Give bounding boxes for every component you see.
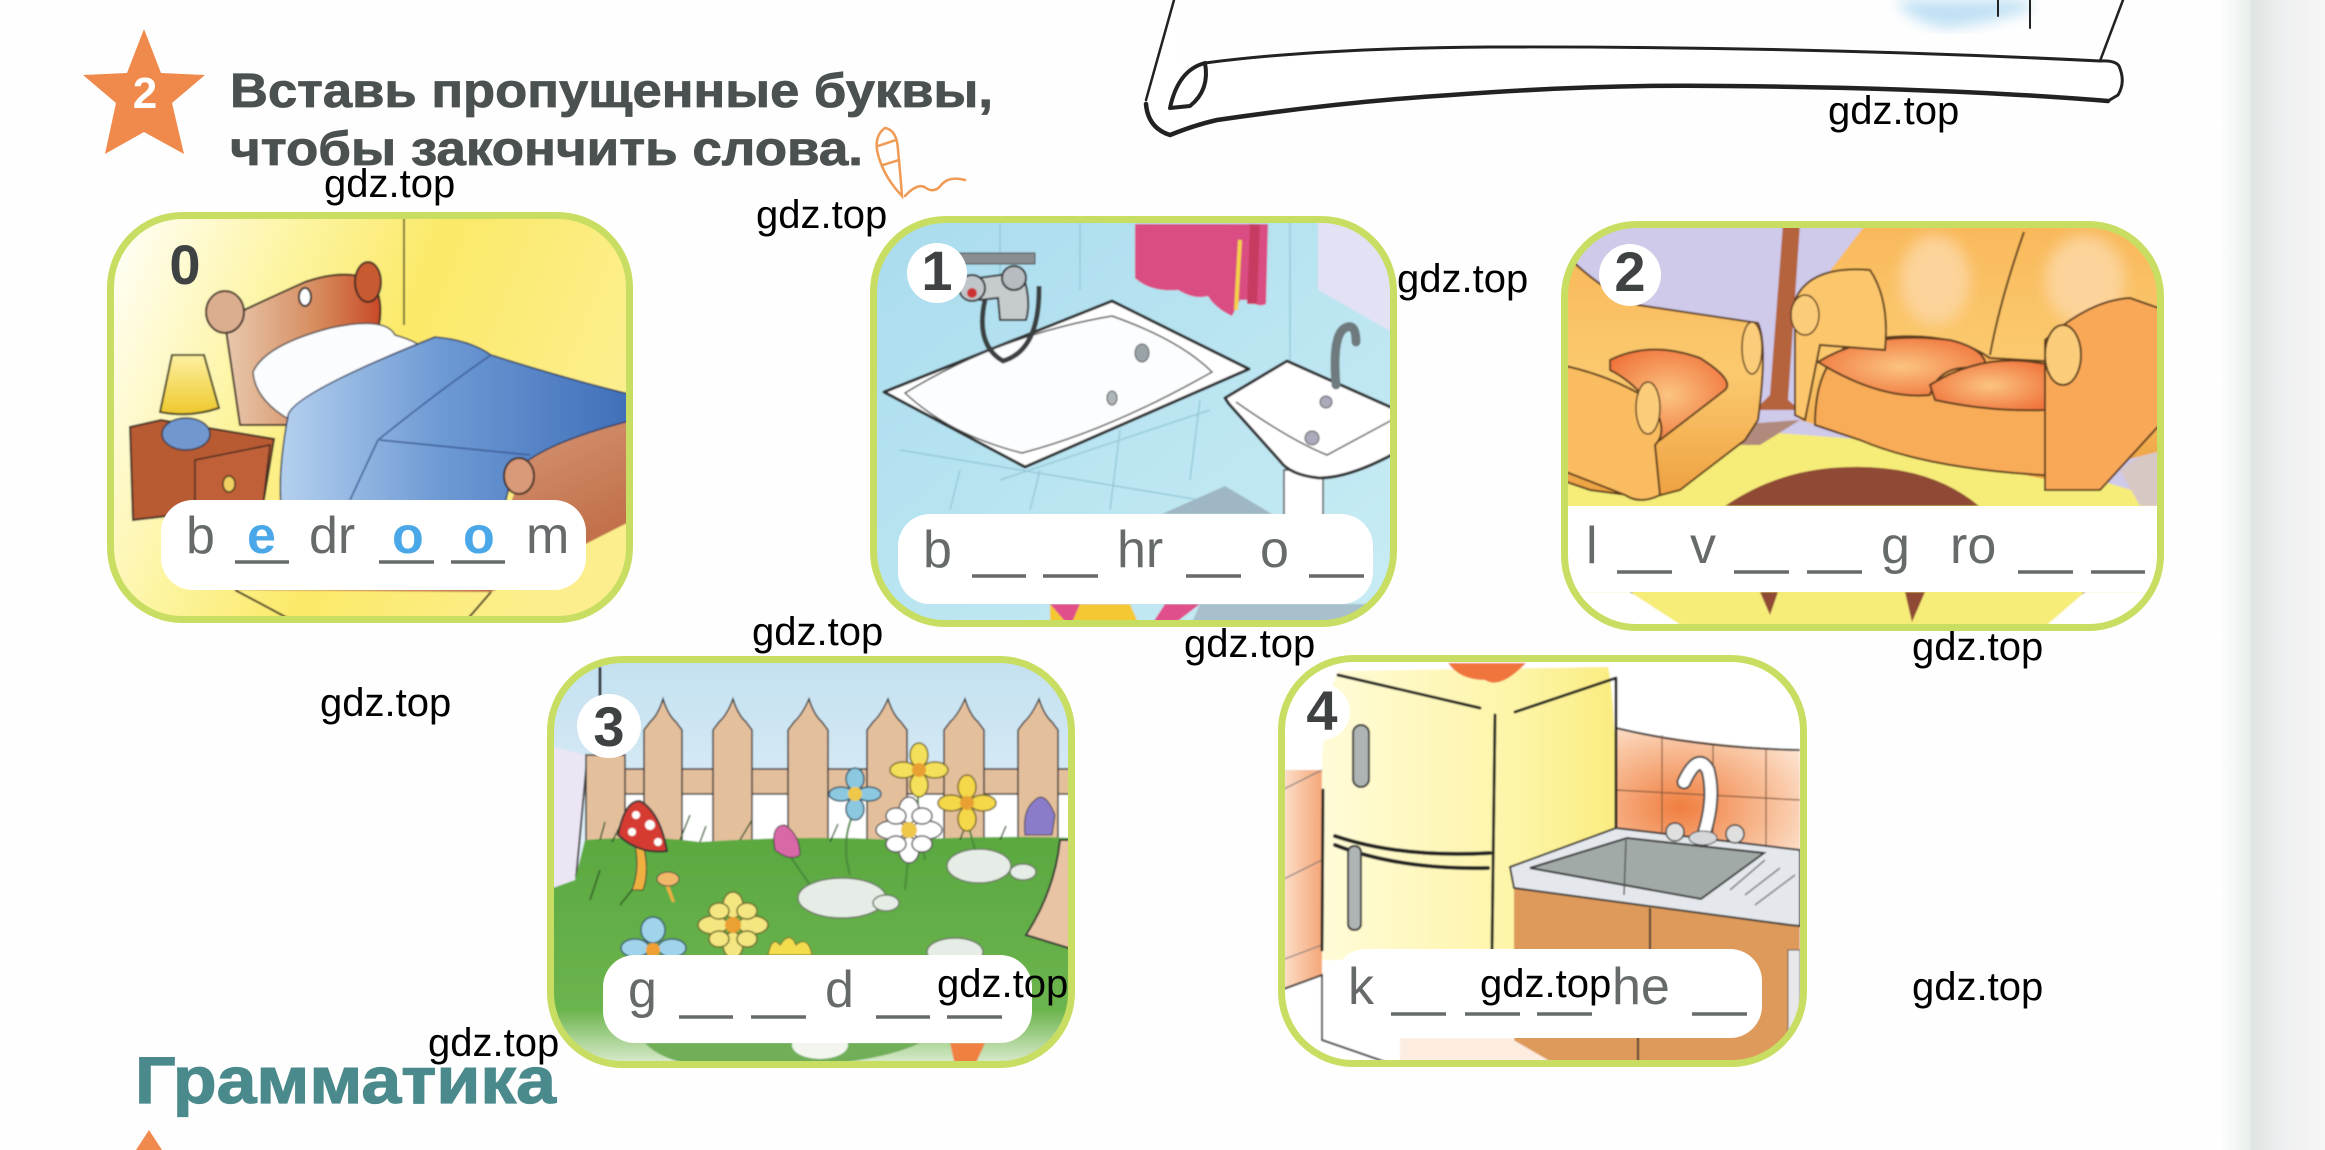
- panel 4: kitchen: [1278, 655, 1807, 1067]
- floor lamp pole: [1755, 224, 1800, 410]
- stones: [798, 849, 1036, 966]
- panel 3 frame: [550, 660, 1072, 1064]
- bed knob: [504, 458, 534, 494]
- nightstand: [130, 420, 274, 520]
- side wall: [554, 746, 586, 887]
- number 4: 4: [1306, 679, 1338, 742]
- instruction heading: Вставь пропущенные буквы,: [230, 65, 993, 118]
- word card: kitchen: [1334, 949, 1762, 1038]
- panel 2 frame: [1564, 224, 2160, 628]
- sink: [1510, 828, 1800, 926]
- cabinet: [1514, 885, 1800, 1067]
- basin tap: [1335, 327, 1356, 385]
- floor rim: [234, 590, 492, 616]
- word card: bedroom: b: [186, 507, 215, 565]
- word card: kitchen: he: [1612, 958, 1670, 1016]
- word card: bedroom: o: [463, 507, 495, 565]
- panel 1 frame: [874, 220, 1394, 624]
- watermarks: gdz.top: [320, 681, 451, 725]
- faucet: [1666, 763, 1744, 845]
- floor rug: [1561, 430, 2164, 631]
- instruction heading: [230, 65, 993, 176]
- watermarks: gdz.top: [324, 162, 455, 206]
- word card: bedroom: [161, 500, 586, 590]
- watermarks: gdz.top: [937, 962, 1068, 1006]
- panel 4 frame: [1282, 658, 1804, 1064]
- instruction heading: чтобы закончить слова.: [230, 123, 863, 176]
- word card: garden: d: [825, 961, 854, 1019]
- shower hose: [982, 286, 1039, 361]
- fox: [950, 1043, 985, 1065]
- number 1: 1: [921, 239, 953, 302]
- icon: pencil scribble: [877, 128, 965, 196]
- word card: bedroom: o: [392, 507, 424, 565]
- basin: [1225, 361, 1397, 478]
- word card: garden: [603, 955, 1032, 1043]
- bathtub: [884, 301, 1249, 467]
- watermarks: gdz.top: [428, 1021, 559, 1065]
- sofa: [1791, 224, 2164, 490]
- word card: bedroom: e: [247, 507, 276, 565]
- watermarks: gdz.top: [752, 610, 883, 654]
- rug edges: [1630, 592, 2086, 595]
- watermarks: gdz.top: [756, 193, 887, 237]
- tile lines: [900, 216, 1290, 510]
- left wall tiles: [1278, 770, 1322, 990]
- bath tap: [958, 253, 1035, 320]
- tree trunk: [1026, 840, 1075, 950]
- bottom grass: [645, 1043, 920, 1066]
- word card: bedroom: m: [526, 507, 569, 565]
- coffee table: [1725, 467, 1979, 506]
- word card: bathroom: o: [1260, 521, 1289, 579]
- back wall tiles: [1616, 728, 1800, 850]
- watermarks: gdz.top: [1912, 965, 2043, 1009]
- word band: [1564, 506, 2161, 592]
- floor wedge: [1162, 486, 1272, 514]
- number 0: 0: [169, 233, 201, 296]
- fence: [586, 699, 1075, 845]
- watermarks: gdz.top: [1480, 962, 1611, 1006]
- blanket: [280, 337, 633, 505]
- armchair: [1561, 250, 1763, 500]
- word card: living room: l: [1586, 517, 1598, 575]
- next star badge, cropped: [136, 1130, 162, 1150]
- toy below card: [1049, 604, 1138, 620]
- panel 3: garden: [547, 656, 1075, 1068]
- word card: living room: g: [1881, 517, 1910, 575]
- mushrooms: [618, 801, 679, 902]
- panel 1: bathroom: [870, 216, 1397, 627]
- bottom floor: [1281, 975, 1400, 1067]
- word card: bathroom: [898, 514, 1373, 604]
- word card: living room: v: [1690, 517, 1716, 575]
- book gutter shading: [2218, 0, 2325, 1150]
- number 3: [577, 694, 641, 758]
- watermarks: gdz.top: [1397, 257, 1528, 301]
- table lamp: [160, 355, 219, 450]
- watermarks: gdz.top: [1184, 622, 1315, 666]
- number 2: 2: [1614, 240, 1646, 303]
- flowers: [621, 743, 1055, 958]
- star badge with number 2: [83, 29, 205, 154]
- stems: [790, 796, 976, 890]
- table legs: [1760, 592, 1925, 622]
- section heading: grammar: Грамматика: [135, 1043, 557, 1117]
- word card: living room: [1586, 517, 2145, 575]
- watermarks: [320, 89, 2043, 1065]
- pillow: [253, 323, 430, 420]
- number 3: 3: [593, 695, 625, 758]
- word card: living room: ro: [1950, 517, 1996, 575]
- watermarks: gdz.top: [1912, 625, 2043, 669]
- word card: garden: g: [628, 961, 657, 1019]
- number 2: [1599, 240, 1661, 306]
- star badge with number 2: 2: [133, 69, 157, 118]
- panel 0 frame: [110, 216, 630, 620]
- decorative scroll at top: [1145, 0, 2123, 135]
- bed headboard: [206, 262, 381, 425]
- fridge: [1322, 663, 1616, 960]
- number 4: [1294, 679, 1350, 742]
- grass: [547, 837, 1075, 1068]
- grass blades: [590, 815, 1006, 905]
- word card: bedroom: dr: [309, 507, 355, 565]
- watermarks: gdz.top: [1828, 89, 1959, 133]
- upper right wall: [1318, 223, 1390, 332]
- towel: [1135, 224, 1268, 316]
- word card: bathroom: hr: [1117, 521, 1163, 579]
- panel 0: bedroom: [107, 212, 633, 623]
- word card: kitchen: k: [1348, 958, 1375, 1016]
- word card: bathroom: b: [923, 521, 952, 579]
- number 1: [907, 239, 967, 303]
- white behind fence: [625, 794, 1075, 844]
- footboard: [236, 422, 626, 593]
- pedestal: [1284, 470, 1323, 520]
- panel 2: living room: [1561, 221, 2164, 631]
